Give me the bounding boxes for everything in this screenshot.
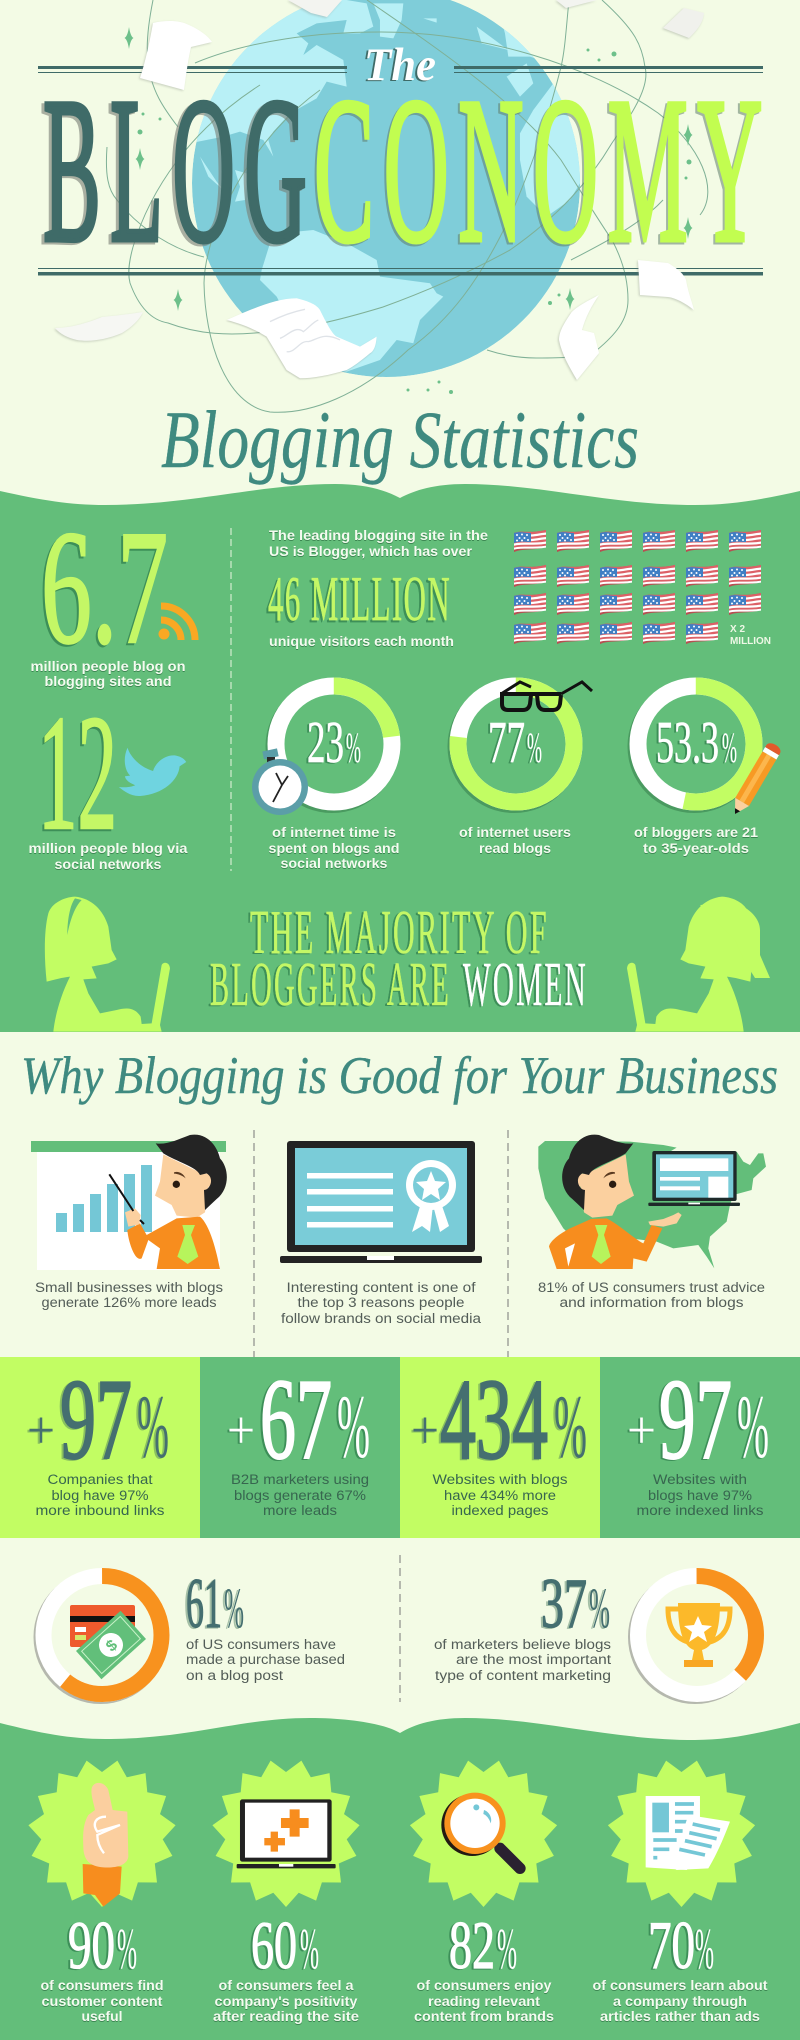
caption: on a blog post — [186, 1668, 283, 1683]
bar chart — [56, 1165, 152, 1232]
icon: woman blogger left — [45, 897, 170, 1032]
icon: laptop with plus signs — [237, 1799, 336, 1868]
panel: blogging statistics green section: WOMEN — [463, 951, 588, 1019]
caption: generate 126% more leads — [42, 1295, 217, 1310]
flying papers — [55, 0, 704, 380]
caption: follow brands on social media — [281, 1311, 482, 1326]
caption: useful — [82, 2009, 122, 2024]
caption: more inbound links — [36, 1503, 165, 1518]
caption: 81% of US consumers trust advice — [538, 1280, 765, 1295]
panel: 37 percent marketers: % — [589, 1577, 610, 1640]
panel: 61 percent purchases: % — [224, 1577, 244, 1640]
caption: of internet time is — [272, 825, 396, 840]
icon: thumbs up — [83, 1783, 128, 1907]
caption: are the most important — [456, 1652, 611, 1667]
caption: social networks — [280, 856, 388, 871]
big number 6.7: 6.7 — [41, 498, 168, 678]
caption: of consumers learn about — [592, 1978, 768, 1993]
caption: Websites with blogs — [432, 1472, 568, 1487]
number 61%: 61 — [186, 1565, 222, 1643]
caption: Small businesses with blogs — [35, 1280, 223, 1295]
title: The Blogconomy: BLOG — [43, 55, 316, 285]
statistic: 70 percent — [592, 1761, 768, 2024]
title word: The: The — [364, 39, 436, 91]
donut: 53.3 percent: % — [722, 725, 737, 772]
caption: the top 3 reasons people — [298, 1295, 464, 1310]
caption: Websites with — [653, 1472, 747, 1487]
donut value: 53.3 — [656, 709, 719, 775]
donut: 77 percent — [448, 680, 592, 856]
tile: +97% inbound links: 97 — [60, 1356, 132, 1483]
rule lines — [38, 66, 763, 276]
caption: million people blog on — [30, 659, 186, 674]
icon: laptop with award ribbon — [280, 1141, 482, 1263]
illustration: presenter with US map and laptop — [538, 1135, 766, 1269]
statistic: 90 percent — [28, 1761, 176, 2024]
donut with trophy icon — [628, 1570, 762, 1704]
value: 90 — [68, 1907, 115, 1983]
statistic: 70 percent: % — [695, 1916, 714, 1981]
donut: 23 percent — [252, 680, 400, 871]
icon: pencil — [728, 741, 783, 818]
statistic: 60 percent — [212, 1761, 360, 2024]
donut value: 77 — [488, 709, 525, 775]
panel: interesting content — [280, 1141, 482, 1326]
tile: +67% leads: % — [337, 1378, 370, 1477]
orbit lines — [106, 0, 708, 412]
caption: of consumers feel a — [218, 1978, 354, 1993]
icon: stopwatch — [252, 748, 308, 815]
value: 60 — [251, 1907, 297, 1983]
caption: articles rather than ads — [600, 2009, 760, 2024]
statistic: 90 percent: % — [117, 1916, 137, 1981]
statistic: 6.7 million — [30, 498, 195, 689]
tile: +434% indexed pages — [400, 1356, 600, 1538]
icon: trophy — [668, 1603, 730, 1667]
icon: rss — [158, 606, 195, 640]
intro text: The leading blogging site in the — [269, 528, 489, 543]
caption: blog have 97% — [52, 1488, 148, 1503]
tile: +97% indexed links: 97 — [659, 1356, 732, 1483]
tile: +97% inbound links: + — [27, 1400, 55, 1460]
laptop — [648, 1151, 740, 1206]
flag legend: X 2 — [730, 624, 745, 635]
caption: and information from blogs — [560, 1295, 744, 1310]
heading: the majority of bloggers are women: BLOGGERS ARE — [210, 951, 451, 1019]
icon: money: $ — [103, 1637, 121, 1655]
caption: to 35-year-olds — [643, 841, 749, 856]
intro text: US is Blogger, which has over — [269, 544, 473, 559]
panel: small businesses leads — [31, 1135, 227, 1310]
heading: Blogging Statistics: Blogging Statistics — [161, 394, 639, 485]
icon: documents — [646, 1796, 730, 1870]
tile: +434% indexed pages: 434 — [440, 1356, 548, 1483]
tile: +434% indexed pages: % — [554, 1378, 587, 1477]
caption: Companies that — [48, 1472, 153, 1487]
tile: +97% indexed links: + — [627, 1400, 656, 1460]
caption: of US consumers have — [186, 1637, 336, 1652]
caption: reading relevant — [428, 1994, 541, 2009]
tile: +67% leads: 67 — [260, 1356, 332, 1483]
caption: blogs generate 67% — [234, 1488, 366, 1503]
figure — [549, 1135, 682, 1269]
caption: content from brands — [414, 2009, 554, 2024]
tile: +67% leads: + — [227, 1400, 255, 1460]
panel: consumer statistics green section — [0, 1718, 800, 2040]
caption: of bloggers are 21 — [634, 825, 759, 840]
caption: made a purchase based — [186, 1652, 345, 1667]
caption: have 434% more — [444, 1488, 556, 1503]
heading: the majority of bloggers are women — [210, 899, 588, 1019]
caption: blogging sites and — [44, 674, 172, 689]
panel: 37 percent marketers — [434, 1565, 762, 1704]
sparkles — [124, 27, 692, 394]
caption: unique visitors each month — [269, 634, 454, 649]
panel: 61 percent purchases — [34, 1565, 345, 1704]
icon: magnifying glass — [441, 1793, 520, 1868]
map of USA — [538, 1141, 766, 1268]
icon: glasses — [500, 682, 592, 710]
tile: +434% indexed pages: + — [411, 1400, 439, 1460]
caption: read blogs — [479, 841, 551, 856]
caption: of consumers enjoy — [416, 1978, 552, 1993]
illustration: presenter and bar chart — [31, 1135, 227, 1270]
donut: 53.3 percent — [628, 680, 783, 856]
statistic: Blogger 46 million — [268, 528, 489, 649]
panel: blogging statistics green section — [0, 484, 800, 1032]
caption: indexed pages — [452, 1503, 549, 1518]
caption: social networks — [54, 857, 162, 872]
caption: Interesting content is one of — [286, 1280, 476, 1295]
value: 70 — [648, 1907, 695, 1983]
caption: more indexed links — [636, 1503, 764, 1518]
caption: B2B marketers using — [231, 1472, 369, 1487]
caption: spent on blogs and — [268, 841, 400, 856]
caption: blogs have 97% — [648, 1488, 752, 1503]
flag pictogram: 23 flags times 2 million — [514, 530, 771, 647]
statistic: 82 percent: % — [497, 1916, 517, 1981]
tile: +97% inbound links: % — [137, 1378, 169, 1477]
globe — [173, 0, 590, 377]
caption: of marketers believe blogs — [434, 1637, 611, 1652]
caption: after reading the site — [213, 2009, 360, 2024]
tile: +67% leads — [200, 1356, 400, 1538]
statistic: 12 million: 12 — [38, 681, 117, 864]
statistic: 60 percent: % — [300, 1916, 319, 1981]
value: 82 — [449, 1907, 495, 1983]
caption: of consumers find — [40, 1978, 164, 1993]
hero illustration: globe with orbit lines and flying papers — [38, 0, 763, 412]
caption: a company through — [613, 1994, 747, 2009]
icon: woman blogger right with ponytail — [627, 897, 770, 1032]
caption: more leads — [263, 1503, 337, 1518]
section background with book-shaped top edge — [0, 1718, 800, 2040]
statistic: Blogger 46 million: 46 MILLION — [268, 564, 451, 634]
caption: of internet users — [459, 825, 571, 840]
tile: +97% indexed links — [600, 1356, 800, 1538]
caption: company's positivity — [214, 1994, 358, 2009]
presenter figure — [109, 1135, 227, 1269]
caption: type of content marketing — [435, 1668, 611, 1683]
paper with handwriting — [227, 298, 377, 378]
donut: 77 percent: % — [527, 725, 542, 772]
tile: +97% inbound links — [0, 1356, 200, 1538]
number 37%: 37 — [541, 1565, 587, 1643]
icon: credit card — [70, 1605, 135, 1647]
section background with book-shaped top edge — [0, 484, 800, 1032]
caption: million people blog via — [28, 841, 188, 856]
panel: four percentage stat tiles — [0, 1356, 800, 1538]
statistic: 82 percent — [410, 1761, 557, 2024]
donut: 23 percent: % — [346, 725, 361, 772]
flag legend: MILLION — [730, 636, 771, 647]
panel: trust advice — [538, 1135, 766, 1310]
donut with card and cash icon — [34, 1570, 168, 1704]
donut value: 23 — [307, 709, 344, 775]
caption: customer content — [42, 1994, 163, 2009]
icon: twitter bird — [119, 748, 186, 796]
